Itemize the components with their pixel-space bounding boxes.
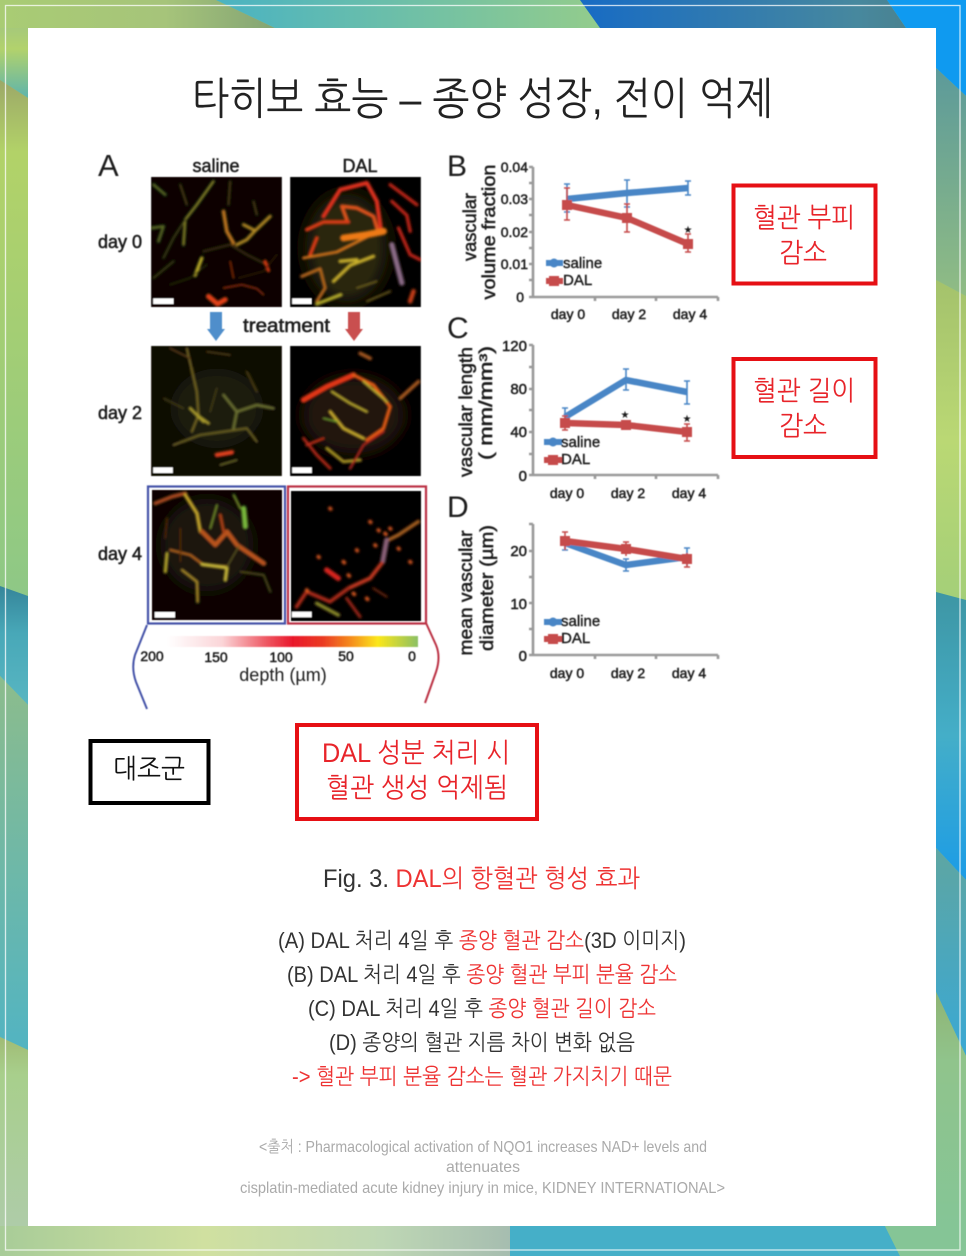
depth axis title: depth (µm)	[239, 665, 327, 685]
arrow: saline treatment	[207, 312, 225, 341]
bracket: DAL	[425, 623, 438, 703]
tick labels	[510, 543, 706, 681]
frame: DAL day 4	[288, 486, 426, 624]
callout: blood vessel length decrease: 감소	[779, 411, 827, 441]
callout: DAL suppresses angiogenesis	[297, 725, 537, 819]
callout: control group	[90, 741, 208, 803]
y axis title: vascular length	[456, 347, 476, 477]
frame: saline day 4	[148, 486, 285, 624]
legend	[544, 434, 600, 468]
depth scale labels: 0	[408, 648, 416, 664]
image: DAL day 2	[289, 345, 422, 477]
image: DAL day 0	[289, 176, 422, 308]
callout: blood vessel length decrease: 혈관 길이	[753, 376, 855, 406]
panel A: microscopy time course	[98, 148, 438, 709]
y axis title: vascular	[460, 193, 480, 261]
saline series	[562, 538, 690, 571]
image: saline day 0	[150, 176, 283, 308]
callout: control group: 대조군	[113, 754, 185, 784]
column label DAL: DAL	[342, 156, 378, 176]
tick labels: 0	[519, 648, 527, 665]
tick labels: 20	[510, 543, 527, 560]
tick labels: day 2	[611, 665, 645, 681]
tick labels: 0.03	[501, 191, 528, 207]
significance star: ★	[684, 225, 693, 236]
image: saline day 4	[151, 489, 283, 621]
tick labels: day 2	[611, 485, 645, 501]
saline series	[564, 180, 691, 212]
tick labels: 0	[519, 468, 527, 485]
chart C: vascular length	[447, 312, 718, 501]
tick labels: day 0	[550, 665, 584, 681]
image: saline day 2	[150, 345, 283, 477]
y axis title: ( mm/mm³)	[476, 346, 496, 460]
tick labels: day 4	[672, 665, 706, 681]
legend: DAL	[563, 272, 592, 289]
panel letter C: C	[447, 312, 469, 345]
y axis title	[456, 346, 496, 477]
depth colour bar	[167, 636, 418, 647]
tick labels: 0.04	[501, 159, 528, 175]
caption list: (A) DAL 처리 4일 후 종양 혈관 감소(3D 이미지)	[278, 928, 686, 953]
caption list: (D) 종양의 혈관 지름 차이 변화 없음	[329, 1030, 635, 1055]
caption list	[278, 928, 686, 1089]
legend	[546, 255, 602, 289]
tick labels: 0.01	[501, 256, 528, 272]
legend: saline	[561, 434, 600, 451]
depth scale labels: 150	[204, 649, 228, 665]
title: 타히보 효능 – 종양 성장, 전이 억제	[192, 75, 773, 124]
chart B: vascular volume fraction	[447, 150, 718, 322]
callout: blood vessel length decrease	[734, 359, 876, 457]
source note: attenuates	[446, 1159, 520, 1176]
row label day 2: day 2	[98, 403, 142, 423]
axes	[529, 167, 718, 301]
legend	[544, 613, 600, 647]
chart D: mean vascular diameter	[447, 491, 718, 681]
depth scale labels	[140, 648, 416, 665]
DAL series	[560, 416, 692, 441]
row label day 4: day 4	[98, 544, 142, 564]
y axis title: volume fraction	[479, 164, 499, 300]
legend: saline	[561, 613, 600, 630]
tick labels: 80	[510, 381, 527, 398]
caption list: (B) DAL 처리 4일 후 종양 혈관 부피 분율 감소	[287, 962, 677, 987]
source note: <출처 : Pharmacological activation of NQO1 increases NAD+ levels and	[259, 1138, 707, 1156]
tick labels: 10	[510, 596, 527, 613]
tick labels: day 0	[550, 485, 584, 501]
callout: blood vessel volume decrease: 감소	[779, 238, 827, 268]
callout: blood vessel volume decrease: 혈관 부피	[753, 203, 855, 233]
significance stars: ★	[683, 414, 692, 425]
treatment label: treatment	[243, 316, 331, 337]
panel letter A: A	[98, 148, 119, 183]
source note	[240, 1138, 725, 1197]
y axis title: diameter (µm)	[477, 525, 497, 651]
arrow: DAL treatment	[345, 312, 363, 341]
panel letter D: D	[447, 491, 469, 524]
y axis title: mean vascular	[456, 530, 476, 656]
legend: DAL	[561, 630, 590, 647]
caption list: (C) DAL 처리 4일 후 종양 혈관 길이 감소	[308, 996, 656, 1021]
callout: DAL suppresses angiogenesis: 혈관 생성 억제됨	[326, 773, 508, 803]
tick labels	[501, 159, 707, 322]
figure caption heading: Fig. 3. DAL의 항혈관 형성 효과	[323, 865, 640, 893]
saline series	[562, 369, 690, 426]
axes	[529, 524, 718, 659]
caption list: -> 혈관 부피 분율 감소는 혈관 가지치기 때문	[292, 1064, 672, 1089]
DAL series	[562, 188, 693, 252]
tick labels: 40	[510, 424, 527, 441]
tick labels: 120	[502, 338, 527, 355]
tick labels	[502, 338, 706, 501]
significance stars: ★	[621, 410, 630, 421]
y axis title	[460, 164, 499, 300]
callout: blood vessel volume decrease	[734, 186, 876, 284]
depth scale labels: 200	[140, 648, 164, 664]
axes	[529, 345, 718, 479]
bracket: saline	[133, 625, 147, 709]
source note: cisplatin-mediated acute kidney injury in mice, KIDNEY INTERNATIONAL>	[240, 1180, 725, 1197]
tick labels: day 4	[673, 306, 707, 322]
depth scale labels: 50	[338, 648, 354, 664]
callout: DAL suppresses angiogenesis: DAL 성분 처리 시	[322, 738, 510, 768]
column label saline: saline	[192, 156, 240, 176]
tick labels: 0	[516, 289, 524, 305]
tick labels: day 0	[551, 306, 585, 322]
significance stars	[621, 410, 692, 425]
legend: saline	[563, 255, 602, 272]
tick labels: day 2	[612, 306, 646, 322]
y axis title	[456, 525, 497, 656]
panel letter B: B	[447, 150, 467, 183]
tick labels: day 4	[672, 485, 706, 501]
DAL series	[560, 532, 692, 567]
tick labels: 0.02	[501, 224, 528, 240]
row label day 0: day 0	[98, 232, 142, 252]
image: DAL day 4	[290, 490, 422, 622]
depth scale labels: 100	[269, 649, 293, 665]
legend: DAL	[561, 451, 590, 468]
